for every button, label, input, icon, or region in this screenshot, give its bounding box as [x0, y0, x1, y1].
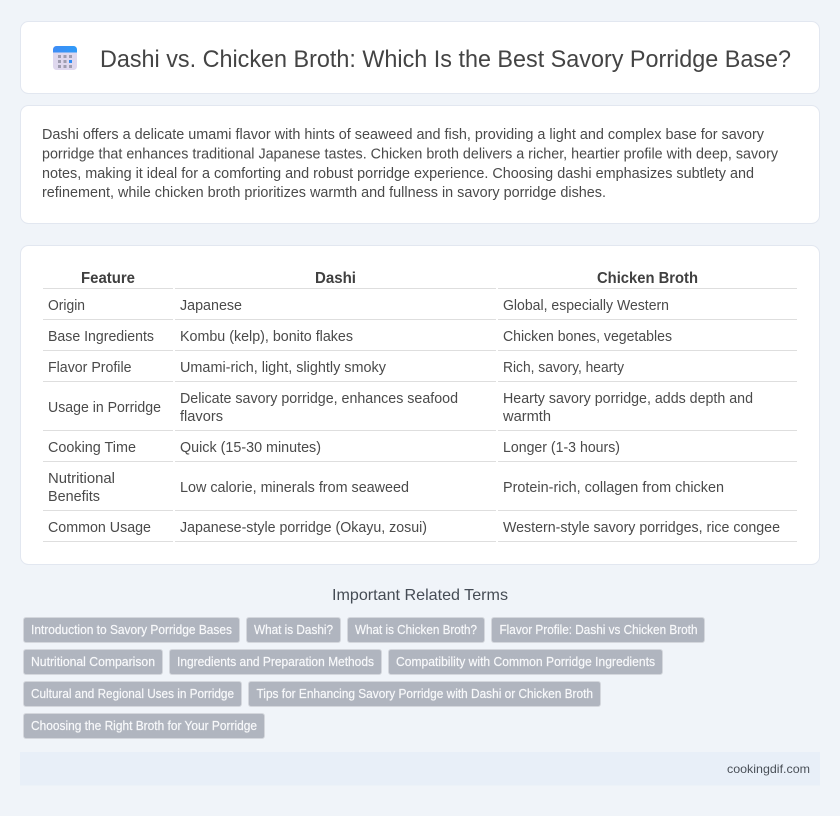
summary text	[42, 127, 779, 201]
table header	[81, 270, 698, 287]
row: usage in porridge: Hearty savory porridge, adds depth and	[503, 391, 753, 407]
row: common usage: Western-style savory porridges, rice congee	[503, 520, 780, 536]
tag: Cultural and Regional Uses in Porridge	[31, 687, 234, 701]
row: usage in porridge: Usage in Porridge	[48, 400, 161, 416]
row: cooking time: Quick (15-30 minutes)	[180, 440, 321, 456]
tag	[24, 714, 264, 738]
tag	[24, 650, 162, 674]
tag: Flavor Profile: Dashi vs Chicken Broth	[500, 623, 698, 637]
row: base ingredients: Kombu (kelp), bonito flakes	[180, 329, 353, 345]
row: usage in porridge: warmth	[502, 409, 551, 425]
row: common usage	[48, 520, 780, 536]
row: nutritional benefits: Benefits	[48, 489, 100, 505]
tag	[348, 618, 484, 642]
row: nutritional benefits: Nutritional	[48, 471, 115, 487]
tag	[170, 650, 382, 674]
row: origin: Japanese	[180, 298, 242, 314]
panel: summary	[20, 106, 820, 224]
row: base ingredients	[48, 329, 672, 345]
tag: Nutritional Comparison	[31, 655, 155, 669]
summary text: notes, making it ideal for a comforting and robust porridge experience. Choosing dashi emphasizes subtlety and	[42, 166, 754, 182]
row: cooking time: Cooking Time	[48, 440, 136, 456]
tag	[246, 618, 340, 642]
title: Dashi vs. Chicken Broth: Which Is the Best Savory Porridge Base?	[100, 46, 791, 73]
row: common usage: Common Usage	[48, 520, 151, 536]
tag: Compatibility with Common Porridge Ingredients	[396, 655, 655, 669]
summary text: Dashi offers a delicate umami flavor with hints of seaweed and fish, providing a light and complex base for savory	[42, 127, 765, 143]
row: nutritional benefits: Protein-rich, collagen from chicken	[503, 480, 724, 496]
icon: calendar	[53, 46, 77, 70]
row: nutritional benefits: Low calorie, minerals from seaweed	[180, 480, 409, 496]
table header: Dashi	[315, 270, 356, 287]
row: common usage: Japanese-style porridge (Okayu, zosui)	[180, 520, 427, 536]
row: origin: Origin	[48, 298, 85, 314]
row: flavor profile	[48, 360, 625, 376]
heading: related terms: Important Related Terms	[332, 587, 508, 604]
summary text: refinement, while chicken broth prioritizes warmth and fullness in savory porridge dishes.	[42, 185, 606, 201]
row: flavor profile: Umami-rich, light, slightly smoky	[180, 360, 387, 376]
row: cooking time	[48, 440, 620, 456]
footer	[20, 752, 820, 786]
summary text: porridge that enhances traditional Japanese tastes. Chicken broth delivers a richer, heartier profile with deep, savory	[42, 146, 779, 162]
tag: Introduction to Savory Porridge Bases	[31, 623, 232, 637]
tag: What is Dashi?	[254, 623, 333, 637]
row: base ingredients: Chicken bones, vegetables	[503, 329, 672, 345]
row: flavor profile: Flavor Profile	[48, 360, 132, 376]
tag	[492, 618, 704, 642]
row: usage in porridge	[48, 391, 753, 425]
tag: Tips for Enhancing Savory Porridge with Dashi or Chicken Broth	[256, 687, 593, 701]
row: origin: Global, especially Western	[503, 298, 669, 314]
footer: cookingdif.com	[727, 762, 810, 776]
tag: Choosing the Right Broth for Your Porridge	[31, 719, 257, 733]
row: origin	[48, 298, 669, 314]
tag: What is Chicken Broth?	[355, 623, 477, 637]
tag	[388, 650, 662, 674]
row: flavor profile: Rich, savory, hearty	[503, 360, 625, 376]
row: cooking time: Longer (1-3 hours)	[503, 440, 620, 456]
row: usage in porridge: flavors	[180, 409, 223, 425]
tag	[24, 618, 240, 642]
tag	[248, 682, 600, 706]
tag list	[24, 618, 704, 738]
row: usage in porridge: Delicate savory porridge, enhances seafood	[180, 391, 458, 407]
tag: Ingredients and Preparation Methods	[177, 655, 374, 669]
row: base ingredients: Base Ingredients	[48, 329, 154, 345]
panel: comparison table	[20, 246, 820, 564]
table header: Feature	[81, 270, 135, 287]
table header: Chicken Broth	[597, 270, 698, 287]
row: nutritional benefits	[48, 471, 724, 505]
panel: header	[20, 22, 820, 94]
tag	[24, 682, 242, 706]
